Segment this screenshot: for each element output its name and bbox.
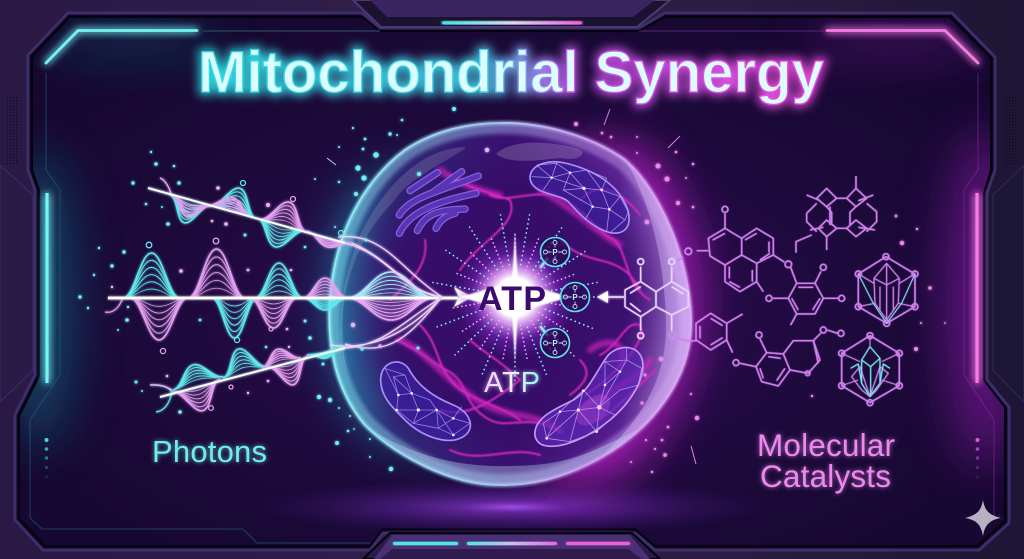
- bottom notch plate: [363, 533, 660, 559]
- title: [198, 40, 824, 105]
- mitochondrion: top right: [530, 162, 629, 233]
- mitochondrion: bottom right: [535, 347, 643, 446]
- veins inside the cell: [390, 170, 655, 456]
- photon wave: centre: [105, 249, 472, 340]
- ATP energy burst: [432, 214, 599, 381]
- phosphate group: lower: [540, 328, 570, 358]
- floor glow: [252, 479, 772, 535]
- wave markers: [146, 180, 344, 410]
- photon particles: pink: [111, 148, 489, 394]
- bottom neon bars: [393, 542, 630, 545]
- catalyst arrow: [597, 291, 624, 303]
- substituted benzene: [766, 264, 845, 325]
- status dots left: [44, 438, 48, 478]
- crystal cage upper: [855, 254, 918, 326]
- cell body: [329, 123, 691, 485]
- cyan corner neon bracket: [46, 30, 197, 383]
- polycyclic cage: [796, 176, 877, 253]
- catalyst molecules: [625, 176, 918, 406]
- icon: sparkle watermark: [965, 500, 1001, 536]
- photon wave: lower: [150, 297, 442, 417]
- oxygen ring: [733, 327, 844, 386]
- label: Photons: Photons: [152, 434, 267, 469]
- ATP label: lower: ATP: [484, 367, 540, 399]
- golgi stack: [399, 172, 478, 233]
- label: Molecular Catalysts: Catalysts: [760, 458, 891, 494]
- membrane inner rim: [329, 123, 691, 485]
- streak marks: [327, 109, 696, 464]
- mitochondrion: bottom left: [381, 362, 470, 440]
- molecular particles: [574, 122, 946, 473]
- photon particles: cyan: [78, 107, 456, 471]
- top notch plate: [353, 0, 670, 27]
- phosphate group: middle: [560, 282, 590, 312]
- cell outer halo: [331, 150, 697, 480]
- phosphate group: upper: [540, 238, 570, 266]
- methyl ring: [669, 313, 743, 353]
- label: Molecular Catalysts: Molecular: [757, 427, 895, 463]
- magenta corner neon bracket: [827, 30, 978, 383]
- photon wave: upper: [148, 178, 442, 297]
- status dots right: [976, 438, 980, 478]
- label: Molecular Catalysts: [757, 427, 895, 494]
- fused ring molecule: [677, 206, 792, 292]
- top centre neon bar: [442, 22, 582, 24]
- crystal cage lower: [839, 333, 902, 406]
- molecule in cell: [625, 259, 688, 339]
- ATP label: core: ATP: [478, 280, 546, 318]
